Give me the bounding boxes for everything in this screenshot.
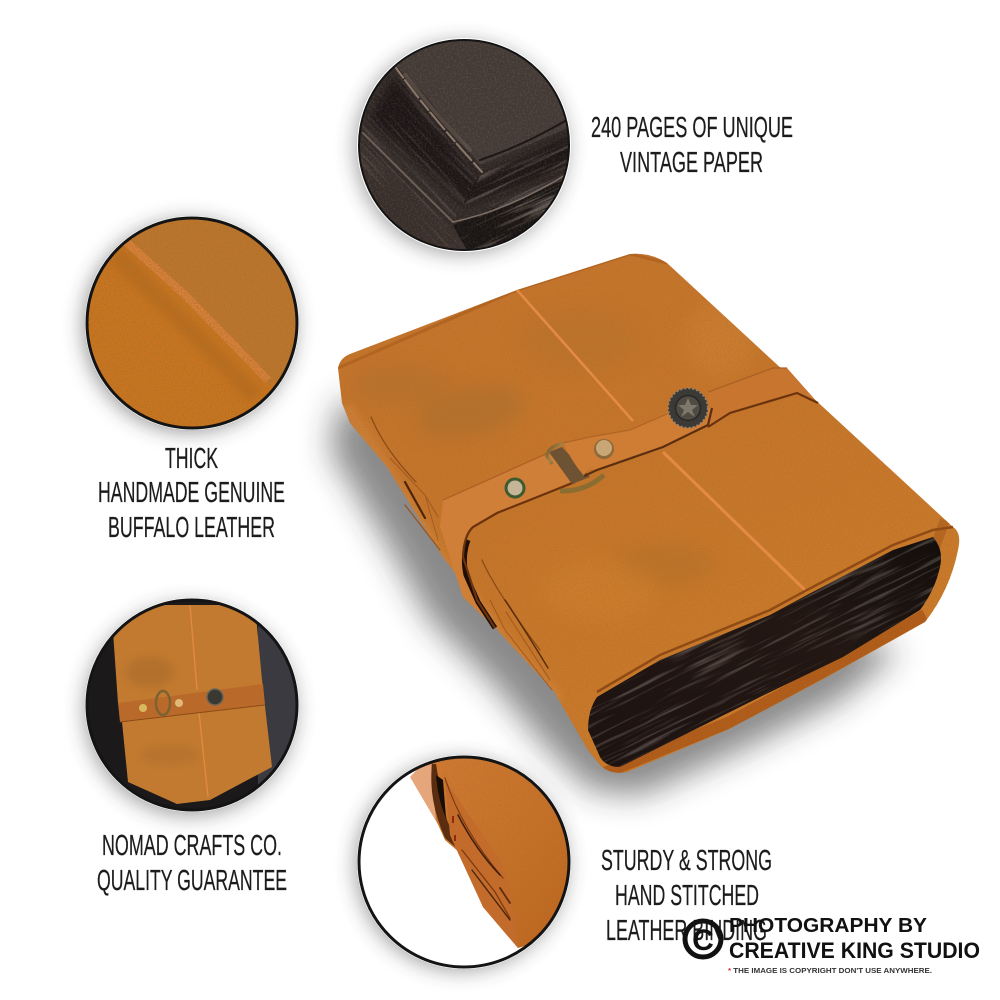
watermark: copyright note: * THE IMAGE IS COPYRIGHT DON'T USE ANYWHERE.	[728, 966, 932, 975]
circle: full journal quality view	[84, 598, 300, 816]
text: quality guarantee caption: QUALITY GUARANTEE	[97, 865, 287, 897]
belt frayed edge	[463, 393, 818, 628]
ring gap shadow	[549, 447, 590, 484]
watermark: photography credit: PHOTOGRAPHY BY	[729, 914, 927, 937]
text: leather caption: HANDMADE GENUINE	[98, 477, 285, 509]
text: binding caption: STURDY & STRONG	[601, 845, 772, 877]
belt upper edge shade	[443, 368, 787, 500]
text: leather caption: BUFFALO LEATHER	[108, 512, 275, 544]
brass ring	[547, 444, 604, 491]
leather shading and rim	[330, 245, 970, 780]
circle: hand stitched binding close-up	[355, 750, 580, 971]
watermark: photography credit: CREATIVE KING STUDIO	[729, 938, 980, 963]
text: vintage paper caption	[591, 112, 793, 179]
button with emblem	[668, 388, 708, 428]
text: leather caption	[98, 443, 285, 544]
circle: vintage paper close-up	[342, 30, 580, 266]
text: binding caption	[601, 845, 772, 947]
slit lower	[663, 452, 807, 592]
page edges	[588, 538, 941, 767]
page block rim	[597, 527, 953, 692]
main product: leather journal	[330, 245, 1000, 846]
text: quality guarantee caption	[97, 830, 287, 897]
text: binding caption: HAND STITCHED	[615, 880, 759, 912]
watermark: photography credit	[729, 914, 980, 963]
text: leather caption: THICK	[165, 443, 218, 475]
rivet right	[594, 439, 614, 459]
text: vintage paper caption: VINTAGE PAPER	[620, 147, 763, 179]
icon: copyright symbol	[685, 921, 721, 957]
belt strap	[440, 453, 575, 628]
belt tab frayed edge	[584, 408, 712, 476]
belt tab	[563, 408, 712, 476]
text: vintage paper caption: 240 PAGES OF UNIQUE	[591, 112, 793, 144]
icon: copyright symbol: C	[692, 924, 714, 957]
belt wrap shadow	[464, 540, 495, 628]
circle: leather close-up	[83, 215, 300, 432]
book drop shadow	[330, 400, 900, 795]
slit upper	[517, 290, 633, 421]
spine stitching	[371, 417, 552, 690]
rivet left	[504, 478, 526, 498]
belt tab upper edge	[563, 414, 667, 443]
text: quality guarantee caption: NOMAD CRAFTS CO.	[102, 830, 282, 862]
text: binding caption: LEATHER BINDING	[606, 915, 767, 947]
book cover	[338, 254, 959, 773]
page block	[588, 537, 941, 767]
